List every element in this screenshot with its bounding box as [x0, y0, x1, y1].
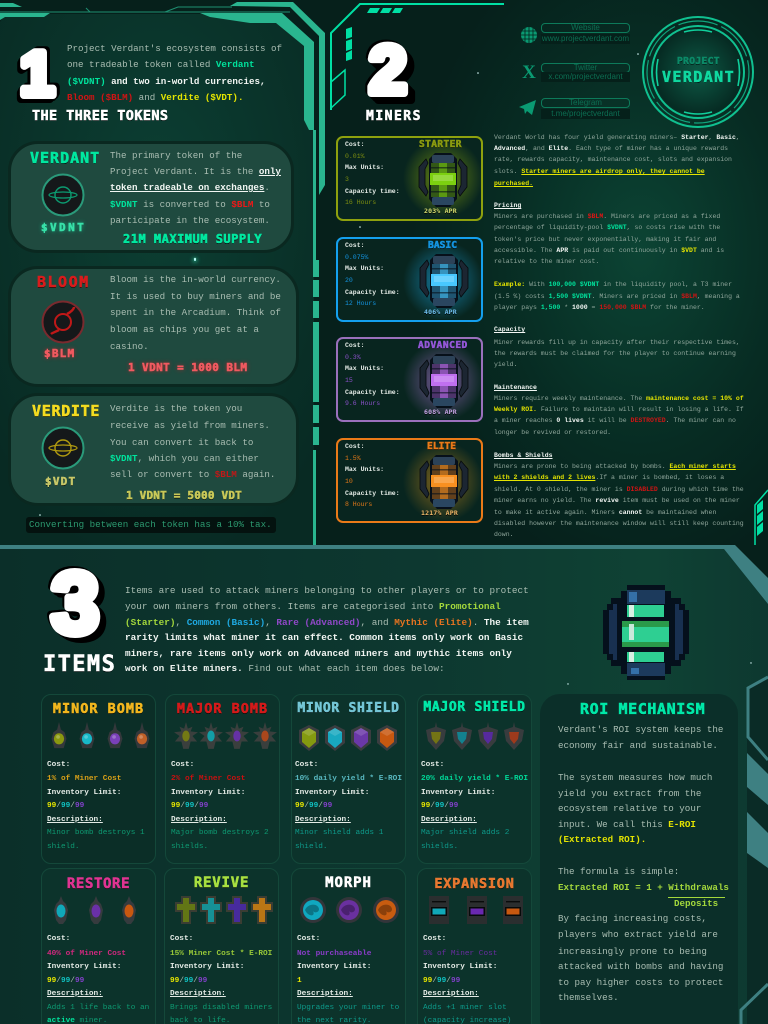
card: expansion: Adds +1 miner slot: [423, 1004, 507, 1012]
text block: items intro: Items are used to attack miners belonging to other players or to protect: [125, 585, 529, 596]
text block: items intro: rarity limits what miner it can effect. Common items only work on Basic: [125, 632, 523, 643]
website link: [541, 23, 630, 33]
card: expansion: [417, 868, 532, 1024]
panel: verdant token: The primary token of the: [110, 150, 242, 161]
panel: starter miner: 203% APR: [424, 207, 457, 215]
heading: miners: MINERS: [366, 109, 422, 124]
card: restore: Cost:: [47, 935, 70, 943]
panel: starter miner: 16 Hours: [345, 199, 376, 206]
card: morph: MORPH: [325, 875, 372, 891]
card: expansion: 99/99/99: [423, 977, 460, 985]
icon: elite capsule: [420, 455, 468, 509]
card: minor bomb: [41, 694, 156, 864]
logo badge: [642, 16, 754, 128]
card: revive: REVIVE: [194, 875, 249, 891]
text block: miners explanation: a miner reaches 0 lives it will be DESTROYED. The miner can no: [494, 417, 736, 424]
panel: elite miner: 1.5%: [345, 455, 361, 462]
panel: verdant token: token tradeable on exchanges.: [110, 182, 270, 193]
panel: starter miner: [336, 136, 483, 221]
text block: miners explanation: Verdant World has four yield generating miners– Starter, Basic,: [494, 134, 740, 141]
card: revive: Inventory Limit:: [170, 963, 244, 971]
panel: starter miner: Capacity time:: [345, 188, 400, 195]
callout: conversion tax: Converting between each token has a 10% tax.: [29, 519, 272, 530]
panel: advanced miner: Max Units:: [345, 365, 384, 372]
text block: miners explanation: longer be revived or restored.: [494, 429, 611, 436]
text block: miners explanation: Advanced, and Elite. Each type of miner has a unique rewards: [494, 145, 728, 152]
card: restore: Adds 1 life back to an: [47, 1004, 149, 1012]
panel: elite miner: Max Units:: [345, 466, 384, 473]
panel: basic miner: 406% APR: [424, 308, 457, 316]
card: morph: Description:: [297, 990, 353, 998]
text block: miners explanation: Pricing: [494, 202, 521, 209]
card: major shield: 99/99/99: [421, 802, 458, 810]
panel: verdant token: VERDANT: [30, 149, 100, 167]
card: minor shield: 99/99/99: [295, 802, 332, 810]
intro text: three tokens: Bloom ($BLM) and Verdite ($VDT).: [67, 92, 243, 103]
card: major shield: Inventory Limit:: [421, 789, 495, 797]
panel: verdite token: sell or convert to $BLM again.: [110, 469, 275, 480]
panel: ROI mechanism: themselves.: [558, 992, 619, 1003]
text block: miners explanation: slots. Starter miners are airdrop only, they cannot be: [494, 168, 705, 175]
panel: verdant token: [8, 141, 294, 253]
icon: advanced capsule: [420, 354, 468, 408]
card: major bomb: shields.: [171, 843, 208, 851]
text block: items intro: your own miners from others. Items are categorised into Promotional: [125, 601, 501, 612]
text block: miners explanation: (1.5 %) costs 1,500 $VDNT. Miners are priced in $BLM, meaning a: [494, 293, 740, 300]
panel: bloom token: It is used to buy miners and be: [110, 291, 281, 302]
icon: telegram: [519, 100, 536, 115]
card: revive: [164, 868, 279, 1024]
icon: basic capsule: [420, 254, 468, 308]
panel: verdant token: participate in the ecosystem.: [110, 215, 270, 226]
panel: bloom token: spent in the Arcadium. Think of: [110, 307, 281, 318]
panel: basic miner: Cost:: [345, 242, 365, 249]
panel: bloom token: $BLM: [44, 347, 75, 360]
icon: expansion slots: [429, 896, 523, 924]
panel: advanced miner: 608% APR: [424, 408, 457, 416]
panel: bloom token: BLOOM: [37, 273, 90, 291]
panel: advanced miner: [336, 337, 483, 422]
text block: miners explanation: Bombs & Shields: [494, 452, 553, 459]
panel: elite miner: Capacity time:: [345, 490, 400, 497]
text block: miners explanation: rate, rewards capacity, maintenance cost, slots and expansion: [494, 156, 732, 163]
telegram link: Telegram: [569, 98, 602, 107]
icon: bloom coin: [42, 300, 84, 344]
card: minor shield: Description:: [295, 816, 351, 824]
panel: advanced miner: 9.6 Hours: [345, 400, 380, 407]
glow: [406, 344, 480, 418]
panel: verdite token: You can convert it back to: [110, 437, 253, 448]
icon: pixel miner capsule: [603, 585, 689, 680]
panel: verdant token: 21M MAXIMUM SUPPLY: [123, 232, 262, 246]
callout: conversion tax: [26, 517, 276, 533]
card: expansion: 5% of Miner Cost: [423, 950, 497, 958]
text block: miners explanation: the rewards must be claimed for the player to continue earning: [494, 350, 736, 357]
card: major bomb: Cost:: [171, 761, 194, 769]
panel: advanced miner: ADVANCED: [418, 340, 468, 351]
card: major bomb: Major bomb destroys 2: [171, 829, 269, 837]
text block: items intro: [125, 585, 529, 674]
card: minor bomb: 99/99/99: [47, 802, 84, 810]
panel: elite miner: Cost:: [345, 443, 365, 450]
card: major shield: [417, 694, 532, 864]
links: [519, 27, 537, 115]
card: restore: RESTORE: [67, 876, 130, 892]
icon: major bombs: [174, 722, 277, 749]
text block: miners explanation: Capacity: [494, 326, 525, 333]
panel: verdite token: receive as yield from miners.: [110, 420, 270, 431]
intro text: three tokens: [67, 43, 282, 103]
panel: ROI mechanism: Verdant's ROI system keeps the: [558, 724, 723, 735]
panel: verdite token: 1 VDNT = 5000 VDT: [126, 489, 242, 502]
panel: starter miner: STARTER: [419, 139, 462, 150]
icon: verdant coin: [42, 174, 84, 216]
text block: items intro: work on Elite miners. Find out what each item does below:: [125, 663, 445, 674]
panel: verdant token: $VDNT: [41, 221, 86, 234]
panel: basic miner: 12 Hours: [345, 300, 376, 307]
text: www.projectverdant.com: [542, 34, 629, 43]
panel: ROI mechanism: ecosystem relative to your: [558, 803, 701, 814]
text: x.com/projectverdant: [548, 72, 623, 81]
card: minor bomb: MINOR BOMB: [53, 701, 144, 717]
glow: [406, 444, 480, 520]
text block: miners explanation: Miners are prone to being attacked by bombs. Each miner starts: [494, 463, 736, 470]
panel: ROI mechanism: (Extracted ROI).: [558, 834, 646, 845]
panel: basic miner: 0.075%: [345, 254, 368, 261]
panel: bloom token: 1 VDNT = 1000 BLM: [128, 361, 247, 374]
panel: ROI mechanism: attacked with bombs and having: [558, 961, 723, 972]
telegram link: [541, 98, 630, 108]
panel: basic miner: BASIC: [428, 240, 457, 251]
panel: elite miner: [336, 438, 483, 523]
text block: miners explanation: disabled however the maintenance window will still keep counting: [494, 520, 744, 527]
card: minor shield: MINOR SHIELD: [297, 701, 400, 716]
panel: ROI mechanism: players who extract yield are: [558, 929, 718, 940]
text block: miners explanation: [494, 134, 744, 538]
number 1: 1: [20, 40, 54, 109]
card: major bomb: [165, 694, 280, 864]
icon: revive crosses: [175, 896, 273, 924]
text block: miners explanation: Miner rewards fill up in capacity after their respective times,: [494, 339, 740, 346]
card: restore: 40% of Miner Cost: [47, 950, 126, 958]
text block: items intro: (Starter), Common (Basic), Rare (Advanced), and Mythic (Elite). The item: [125, 617, 529, 628]
panel: elite miner: 10: [345, 478, 353, 485]
icon: sparkle: [194, 259, 196, 261]
panel: starter miner: 0.01%: [345, 153, 365, 160]
logo badge: VERDANT: [662, 68, 735, 86]
panel: starter miner: 3: [345, 176, 349, 183]
glow: [406, 142, 480, 214]
text block: miners explanation: purchased.: [494, 180, 533, 187]
panel: verdant token: Project Verdant. It is the only: [110, 166, 281, 177]
panel: verdite token: VERDITE: [32, 402, 100, 420]
stars: [26, 51, 752, 685]
panel: verdant token: $VDNT is converted to $BLM to: [110, 199, 270, 210]
heading: items: ITEMS: [43, 652, 116, 677]
card: revive: 15% Miner Cost * E-ROI: [170, 950, 272, 958]
icon: verdite coin: [42, 426, 84, 470]
panel: ROI mechanism: increasingly prone to being: [558, 946, 707, 957]
panel: ROI mechanism: economy fair and sustainable.: [558, 740, 718, 751]
icon: major shields: [426, 722, 524, 750]
panel: bloom token: casino.: [110, 341, 149, 352]
panel: verdite token: $VDT: [45, 475, 76, 488]
icon: starter capsule: [418, 153, 468, 207]
icon: minor bombs: [52, 722, 150, 748]
card: restore: 99/99/99: [47, 977, 84, 985]
panel: advanced miner: 15: [345, 377, 353, 384]
card: minor shield: shield.: [295, 843, 328, 851]
panel: bloom token: [8, 266, 299, 387]
text block: miners explanation: Weekly ROI. Failure to maintain will result in losing a life. If: [494, 406, 744, 413]
number 2: 2: [369, 32, 407, 108]
card: minor shield: Minor shield adds 1: [295, 829, 383, 837]
card: major bomb: MAJOR BOMB: [177, 701, 268, 717]
panel: ROI mechanism: yield you extract from the: [558, 788, 701, 799]
card: minor shield: 10% daily yield * E-ROI: [295, 775, 402, 783]
card: morph: [291, 868, 406, 1024]
intro text: three tokens: one tradeable token called Verdant: [67, 59, 254, 70]
panel: bloom token: bloom as chips you get at a: [110, 324, 259, 335]
text block: miners explanation: yield.: [494, 361, 517, 368]
items section: [0, 547, 768, 1024]
card: minor shield: Inventory Limit:: [295, 789, 369, 797]
website link: Website: [571, 23, 600, 32]
panel: verdite token: [8, 393, 299, 506]
card: minor bomb: Inventory Limit:: [47, 789, 121, 797]
panel: verdite token: $VDNT, which you can either: [110, 453, 259, 464]
panel: ROI mechanism: [540, 694, 738, 1024]
card: revive: Cost:: [170, 935, 193, 943]
text block: miners explanation: accessible. The APR is paid out continuously in $VDT and is: [494, 247, 724, 254]
panel: starter miner: Cost:: [345, 141, 365, 148]
card: major bomb: Inventory Limit:: [171, 789, 245, 797]
text block: miners explanation: with 2 shields and 2 lives.If a miner is bombed, it loses a: [494, 474, 724, 481]
card: major bomb: Description:: [171, 816, 227, 824]
panel: starter miner: Max Units:: [345, 164, 384, 171]
panel: ROI mechanism: to pay higher costs to protect: [558, 977, 723, 988]
text block: miners explanation: player pays 1,500 * 1000 = 150,000 $BLM for the miner.: [494, 304, 705, 311]
text block: miners explanation: Example: With 100,000 $VDNT in the liquidity pool, a T3 miner: [494, 281, 732, 288]
text block: miners explanation: Miners require weekly maintenance. The maintenance cost = 10% of: [494, 395, 744, 402]
text block: miners explanation: down.: [494, 531, 514, 538]
text block: miners explanation: Maintenance: [494, 384, 537, 391]
panel: elite miner: 8 Hours: [345, 501, 372, 508]
intro text: three tokens: Project Verdant's ecosystem consists of: [67, 43, 282, 54]
card: minor bomb: 1% of Miner Cost: [47, 775, 121, 783]
card: minor bomb: Description:: [47, 816, 103, 824]
panel: elite miner: 1217% APR: [421, 509, 458, 517]
card: minor bomb: Minor bomb destroys 1: [47, 829, 145, 837]
panel: advanced miner: 0.3%: [345, 354, 361, 361]
miners frame: [331, 4, 768, 545]
card: revive: 99/99/99: [170, 977, 207, 985]
card: major shield: 20% daily yield * E-ROI: [421, 775, 528, 783]
intro text: three tokens: ($VDNT) and two in-world currencies,: [67, 76, 266, 87]
text block: miners explanation: shield. At 0 shield, the miner is DISABLED during which time the: [494, 486, 744, 493]
text: t.me/projectverdant: [551, 109, 620, 118]
card: major shield: shields.: [421, 843, 458, 851]
panel: bloom token: Bloom is the in-world currency.: [110, 274, 281, 285]
text block: miners explanation: relative to the miner cost.: [494, 258, 599, 265]
card: morph: Cost:: [297, 935, 320, 943]
card: revive: Description:: [170, 990, 226, 998]
panel: basic miner: 20: [345, 277, 353, 284]
panel: ROI mechanism: Deposits: [674, 898, 718, 909]
text block: miners explanation: token's price but never exponentially, making it fair and: [494, 236, 716, 243]
card: restore: Description:: [47, 990, 103, 998]
twitter link: [541, 63, 630, 73]
panel: ROI mechanism: ROI MECHANISM: [580, 700, 705, 718]
card: morph: Upgrades your miner to: [297, 1004, 399, 1012]
twitter link: Twitter: [574, 63, 597, 72]
card: expansion: EXPANSION: [434, 876, 515, 892]
heading: the three tokens: THE THREE TOKENS: [32, 108, 168, 124]
card: major shield: MAJOR SHIELD: [423, 700, 526, 715]
text block: miners explanation: Miners are purchased in $BLM. Miners are priced as a fixed: [494, 213, 720, 220]
icon: minor shields: [299, 725, 397, 751]
card: major shield: Cost:: [421, 761, 444, 769]
card: expansion: Cost:: [423, 935, 446, 943]
panel: advanced miner: Capacity time:: [345, 389, 400, 396]
panel: ROI mechanism: By facing increasing costs,: [558, 913, 707, 924]
panel: basic miner: Capacity time:: [345, 289, 400, 296]
icon: morph orbs: [300, 897, 399, 923]
card: restore: [41, 868, 156, 1024]
panel: basic miner: [336, 237, 483, 322]
card: revive: Brings disabled miners: [170, 1004, 272, 1012]
panel: ROI mechanism: The system measures how much: [558, 772, 712, 783]
text block: items intro: miners, rare items only work on Advanced miners and mythic items only: [125, 648, 512, 659]
panel: ROI mechanism: input. We call this E-ROI: [558, 819, 696, 830]
text block: miners explanation: percentage of liquidity-pool $VDNT, so costs rise with the: [494, 224, 720, 231]
glow: [406, 244, 480, 318]
icon: X: X: [522, 62, 536, 83]
card: expansion: Inventory Limit:: [423, 963, 497, 971]
card: morph: Inventory Limit:: [297, 963, 371, 971]
card: morph: 1: [297, 977, 302, 985]
text block: miners explanation: miner earns no yield. The revive item must be used on the miner: [494, 497, 740, 504]
card: major shield: Description:: [421, 816, 477, 824]
text block: miners explanation: to make it active again. Miners cannot be maintained when: [494, 509, 716, 516]
number 3: 3: [51, 555, 99, 650]
card: minor bomb: Cost:: [47, 761, 70, 769]
card: minor shield: Cost:: [295, 761, 318, 769]
panel: verdite token: Verdite is the token you: [110, 403, 242, 414]
icon: globe: [521, 27, 537, 43]
card: major bomb: 2% of Miner Cost: [171, 775, 245, 783]
panel: ROI mechanism: Extracted ROI = 1 + Withdrawals: [558, 882, 729, 893]
card: restore: Inventory Limit:: [47, 963, 121, 971]
card: major shield: Major shield adds 2: [421, 829, 509, 837]
card: minor shield: [291, 694, 406, 864]
icon: restore lanterns: [54, 896, 136, 924]
card: expansion: Description:: [423, 990, 479, 998]
logo badge: PROJECT: [677, 56, 720, 67]
panel: advanced miner: Cost:: [345, 342, 365, 349]
card: morph: Not purchaseable: [297, 950, 371, 958]
panel: ROI mechanism: The formula is simple:: [558, 866, 679, 877]
panel: elite miner: ELITE: [427, 441, 456, 452]
card: major bomb: 99/99/99: [171, 802, 208, 810]
card: minor bomb: shield.: [47, 843, 80, 851]
panel: basic miner: Max Units:: [345, 265, 384, 272]
